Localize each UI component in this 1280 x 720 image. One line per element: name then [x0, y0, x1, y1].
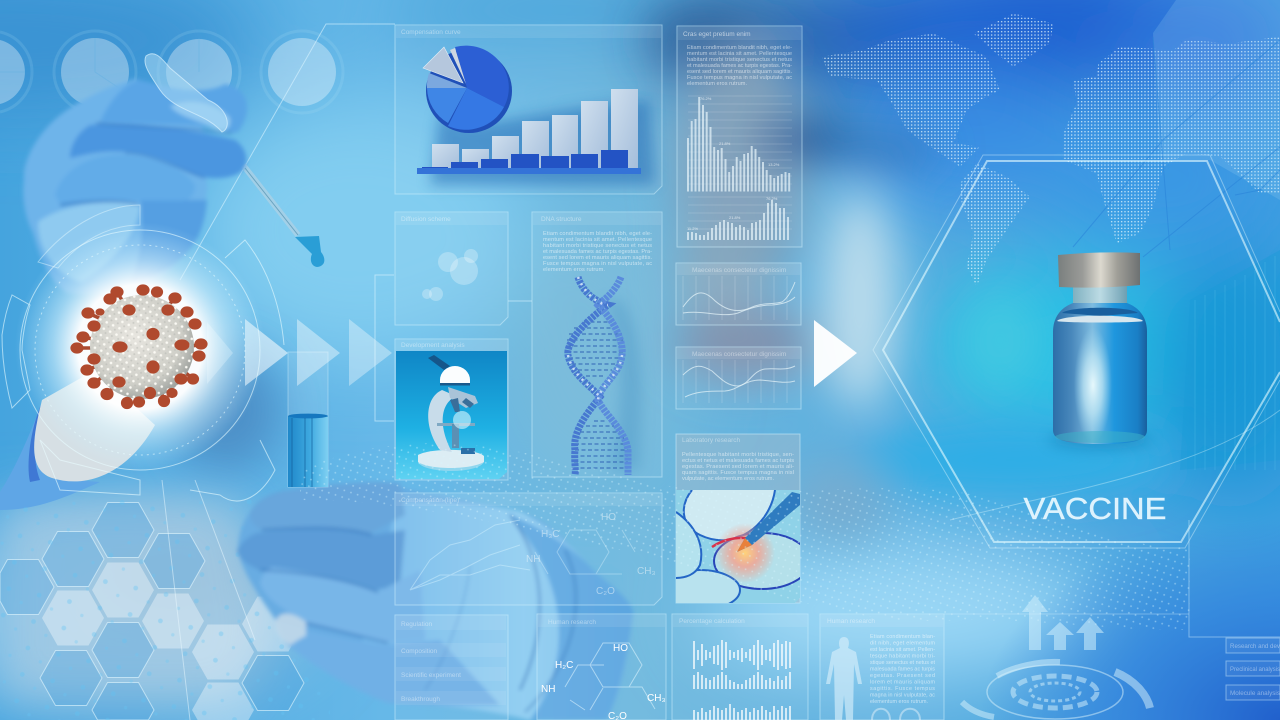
text block: tesque habitant morbi tri-: [870, 654, 935, 660]
text block: est lacinia sit amet. Pellen-: [870, 647, 935, 653]
vial body: [1053, 303, 1147, 444]
finger one: [250, 482, 405, 533]
glove base: [238, 483, 633, 720]
panel: molecule: HO: [613, 643, 628, 654]
panel: laboratory research: Laboratory research: [682, 437, 741, 444]
vial cap: [1058, 252, 1140, 288]
panel: compensation line chart: [395, 493, 662, 605]
finger four: [277, 622, 500, 705]
world map: [822, 13, 1280, 287]
text block: mentum est lacinia sit amet. Pellentesque: [687, 51, 792, 57]
text block: Fusce tempus magna in nisl vulputate, ac: [687, 75, 792, 81]
pipette bulb: [145, 54, 227, 132]
building structure lines: [1073, 0, 1280, 470]
dot field: [300, 443, 1190, 630]
sleeve: [0, 402, 100, 510]
panel: compensation line chart: Compensation (line): [401, 497, 459, 504]
text block: malesuada fames ac turpis: [870, 666, 935, 672]
vial neck: [1073, 285, 1127, 305]
histogram charts: 13.2%: [768, 162, 780, 167]
text block: dit nibh, eget elementum: [870, 640, 936, 646]
text block: [682, 452, 794, 482]
up arrows: [1022, 595, 1104, 650]
chart shadow: [430, 100, 655, 185]
virus with glow: [2, 205, 284, 501]
text block: esent sed lorem et mauris aliquam sagittis.: [543, 255, 652, 261]
text block: [870, 634, 936, 705]
text block: magna in nisl vulputate, ac: [870, 692, 935, 698]
text block: Etiam condimentum blandit nibh, eget ele-: [687, 45, 792, 51]
panel: dna structure: DNA structure: [541, 216, 582, 223]
vaccine label: VACCINE: [1024, 491, 1166, 526]
panel: compensation curve: [395, 25, 662, 194]
panel: laboratory research: [676, 434, 800, 604]
pipette: [243, 165, 324, 267]
text block: et malesuada fames ac turpis egestas. Pra-: [687, 63, 792, 69]
panel: percentage calculation: Percentage calculation: [679, 618, 745, 625]
panel: human research: [820, 614, 944, 720]
text block: Etiam condimentum blan-: [870, 634, 935, 640]
text block: Pellentesque habitant morbi tristique, sen-: [682, 452, 794, 458]
targeting rings: [2, 205, 284, 501]
coat and sleeve: [0, 370, 265, 700]
virus spikes: [77, 290, 201, 403]
histogram charts: [687, 96, 792, 240]
histogram charts: 21.8%: [729, 215, 741, 220]
virus sphere: [90, 295, 194, 399]
panel: molecule: [537, 614, 666, 720]
text block: stique senectus et netus et: [870, 660, 936, 666]
panel: cras eget pretium enim: [677, 26, 802, 247]
radial hud: [962, 662, 1150, 719]
text block: egestas. Praesent sed lorem et mauris ali-: [682, 464, 794, 470]
text block: egestas. Praesent sed: [870, 673, 935, 679]
text block: Etiam condimentum blandit nibh, eget ele-: [543, 231, 652, 237]
panel: compensation curve: Compensation curve: [401, 29, 461, 36]
panel: statistics rows: Scientific experiment: [401, 672, 461, 679]
panel: development analysis: Development analysis: [401, 342, 465, 349]
finger two: [237, 529, 405, 590]
panel: line chart upper: Maecenas consectetur dignissim: [692, 267, 786, 274]
finger three: [260, 567, 425, 643]
panel: line chart upper: [676, 263, 801, 325]
text block: elementum eros rutrum.: [870, 699, 928, 705]
circular pie gauges: [0, 31, 343, 113]
middle finger: [55, 155, 195, 207]
panel: molecule: CH₃: [647, 693, 666, 704]
molecule circles: [422, 249, 478, 301]
side buttons: Molecule analysis: [1230, 690, 1280, 697]
text block: esent sed lorem et mauris aliquam sagittis.: [687, 69, 792, 75]
panel: dna structure: [532, 212, 662, 477]
index finger: [70, 124, 246, 178]
decorative hexagon network: [0, 480, 330, 720]
connector lines: [180, 24, 532, 421]
text block: habitant morbi tristique senectus et netus: [687, 57, 792, 63]
text block: quam sagittis. Fusce tempus magna in nisl: [682, 470, 794, 476]
flow arrows: [207, 319, 857, 387]
vial highlight: [1074, 327, 1112, 443]
test tube: [288, 352, 328, 487]
thumb: [100, 80, 247, 133]
petri dish image: [676, 490, 800, 603]
panel: percentage calculation: [672, 614, 808, 720]
panel: human research: Human research: [827, 618, 875, 625]
panel: statistics rows: Breakthrough: [401, 696, 440, 703]
lower gloved hand: [237, 482, 633, 720]
text block: habitant morbi tristique senectus et netus: [543, 243, 652, 249]
hexagon frame: [873, 155, 1280, 548]
text block: elementum eros rutrum.: [543, 267, 605, 273]
histogram charts: 11.2%: [687, 226, 698, 231]
histogram charts: 76.2%: [700, 96, 712, 101]
pipette tube: [243, 165, 298, 235]
bar chart: [417, 89, 641, 174]
text block: ectus et netus et malesuada fames ac turpis: [682, 458, 794, 464]
side buttons: [1189, 520, 1280, 700]
panel: compensation line chart: CH₃: [637, 566, 656, 577]
panel: statistics rows: Regulation: [401, 621, 432, 628]
histogram charts: 21.8%: [719, 141, 731, 146]
panel: statistics rows: [395, 615, 508, 720]
panel: compensation line chart: C₂O: [596, 586, 615, 597]
panel: diffusion scheme: [395, 212, 508, 325]
panel: development analysis: [395, 339, 508, 480]
upper gloved hand: [23, 79, 247, 294]
pipette drop: [295, 236, 324, 267]
icon: microscope: [418, 355, 484, 471]
panel: molecule: Human research: [548, 619, 596, 626]
text block: et malesuada fames ac turpis egestas. Pra-: [543, 249, 652, 255]
panel: cras eget pretium enim: Cras eget pretium enim: [683, 31, 751, 38]
histogram charts: 76.2%: [766, 196, 778, 201]
panel: line chart lower: [676, 347, 801, 409]
glove palm: [23, 79, 207, 294]
text block: vulputate, ac elementum eros rutrum.: [682, 476, 774, 482]
text block: [543, 231, 652, 273]
panel: molecule: NH: [541, 684, 555, 695]
panel: line chart lower: Maecenas consectetur dignissim: [692, 351, 786, 358]
ring finger: [38, 202, 140, 282]
text block: mentum est lacinia sit amet. Pellentesque: [543, 237, 652, 243]
panel: molecule: H₂C: [555, 660, 573, 671]
glove cuff: [360, 502, 633, 720]
text block: Fusce tempus magna in nisl vulputate, ac: [543, 261, 652, 267]
icon: human figure: [826, 637, 862, 720]
panel: compensation line chart: HO: [601, 512, 616, 523]
dna helix: [567, 277, 630, 475]
panel: diffusion scheme: Diffusion scheme: [401, 216, 451, 223]
vaccine vial: [1048, 252, 1152, 449]
panel: statistics rows: Composition: [401, 648, 438, 655]
panel: compensation line chart: NH: [526, 554, 540, 565]
cuff: [34, 370, 155, 481]
text block: [687, 45, 792, 87]
panel: compensation line chart: H₃C: [541, 529, 560, 540]
text block: lorem et mauris aliquam: [870, 680, 936, 686]
text block: elementum eros rutrum.: [687, 81, 747, 87]
pie chart: [423, 46, 512, 133]
text block: sagittis. Fusce tempus: [870, 686, 935, 692]
